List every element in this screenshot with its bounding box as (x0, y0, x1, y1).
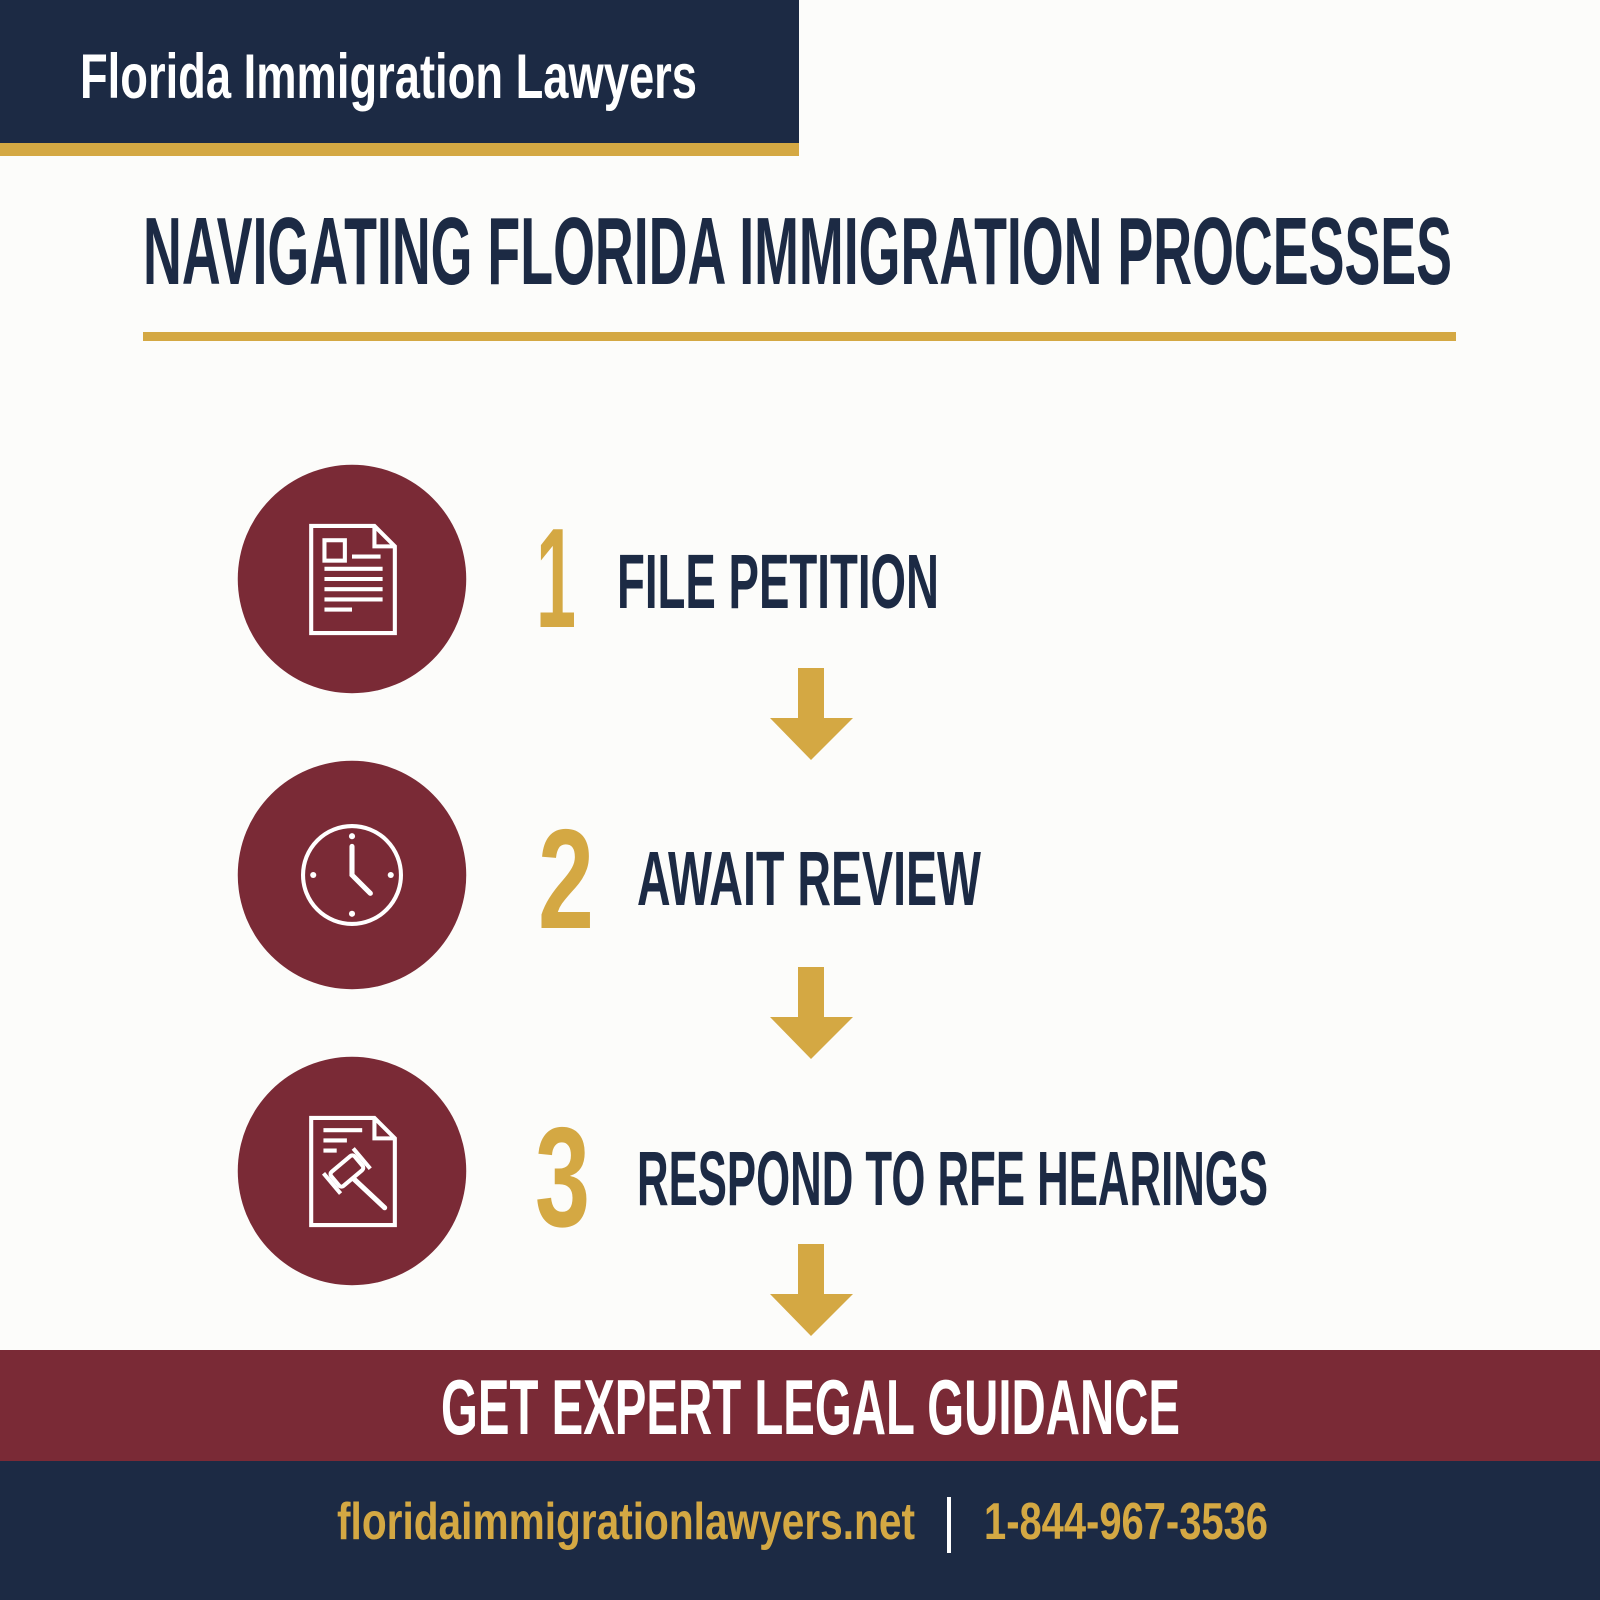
number 2: 2 (538, 800, 594, 959)
icon: clock circle (238, 761, 466, 989)
banner: call to action (0, 1350, 1600, 1462)
footer contact: floridaimmigrationlawyers.net (337, 1493, 915, 1551)
label: file petition: FILE PETITION (617, 539, 939, 625)
number 1: 1 (536, 499, 576, 658)
icon: document with gavel circle (238, 1057, 466, 1285)
arrow 2 (770, 967, 853, 1059)
footer contact: 1-844-967-3536 (984, 1493, 1268, 1551)
step 2 (238, 761, 981, 989)
arrow 1 (770, 668, 853, 760)
footer contact (0, 1461, 1600, 1600)
number 3: 3 (535, 1098, 590, 1257)
header text: Florida Immigration Lawyers (80, 42, 697, 112)
header bar (0, 0, 799, 156)
label: await review: AWAIT REVIEW (637, 836, 981, 922)
icon: document circle (238, 465, 466, 693)
title underline (143, 332, 1456, 341)
step 1 (238, 465, 939, 693)
step 3 (238, 1057, 1268, 1285)
arrow 3 (770, 1244, 853, 1336)
